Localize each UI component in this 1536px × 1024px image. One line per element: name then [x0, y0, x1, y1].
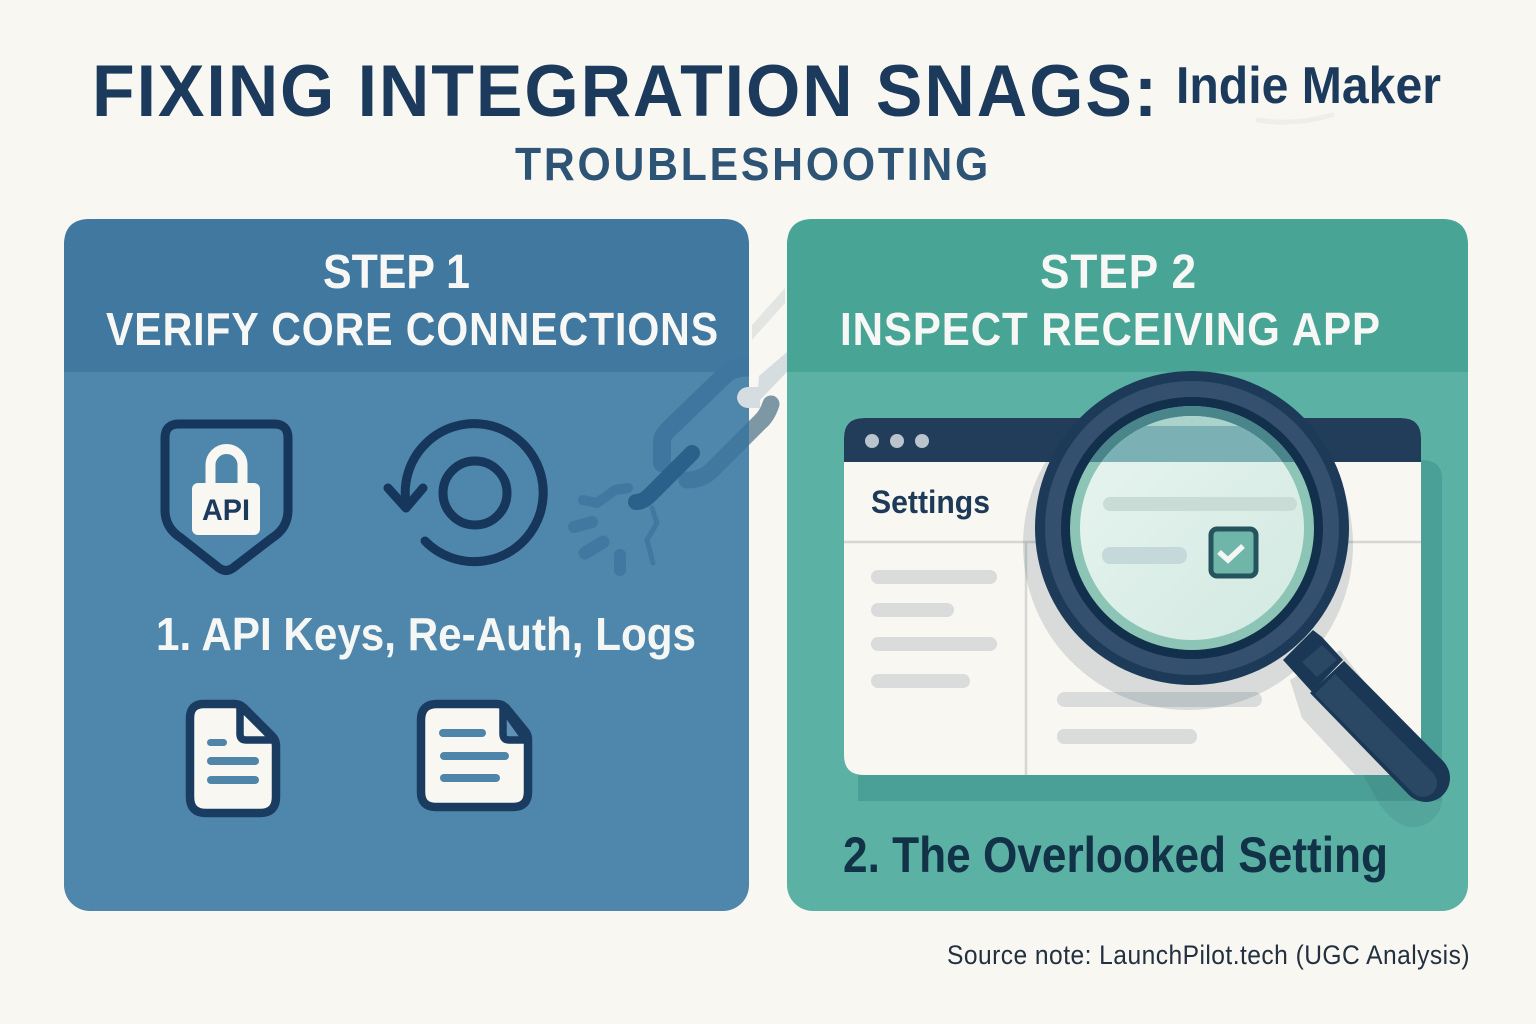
icon: log file portrait [190, 704, 276, 813]
step 1 heading [106, 246, 719, 355]
icon: API shield lock [165, 424, 288, 570]
panel: step 2 [787, 219, 1468, 911]
magnifier shadow [1023, 462, 1442, 827]
title: FIXING INTEGRATION SNAGS: [92, 51, 1159, 132]
magnified content [1102, 497, 1297, 576]
settings window [844, 418, 1421, 775]
panel: step 1 [64, 219, 749, 911]
window shadow [858, 460, 1442, 801]
icon: re-auth refresh [388, 424, 543, 562]
step 1 heading: VERIFY CORE CONNECTIONS [106, 303, 719, 355]
lens glass [1080, 406, 1304, 640]
sidebar placeholder lines [871, 570, 997, 688]
checkbox [1211, 529, 1256, 576]
source note: Source note: LaunchPilot.tech (UGC Analysis) [947, 940, 1470, 970]
icon: magnifying glass [1035, 371, 1450, 802]
window control dots [865, 434, 929, 448]
icon: log file landscape [421, 704, 528, 807]
icon: broken chain link [574, 288, 787, 570]
subtitle: TROUBLESHOOTING [515, 138, 991, 190]
icon: API shield lock: API [202, 494, 250, 527]
step 1 label: 1. API Keys, Re-Auth, Logs [156, 608, 696, 660]
title: Indie Maker [1176, 57, 1441, 115]
step 2 heading: STEP 2 [1040, 246, 1197, 299]
step 1 heading: STEP 1 [323, 246, 470, 299]
step 2 heading: INSPECT RECEIVING APP [840, 303, 1381, 355]
settings heading: Settings [871, 484, 990, 520]
content placeholder lines [1057, 692, 1262, 744]
lens frame [1035, 371, 1349, 685]
step 2 label: 2. The Overlooked Setting [843, 827, 1388, 883]
magnifier handle [1283, 630, 1450, 802]
step 2 heading [840, 246, 1381, 355]
